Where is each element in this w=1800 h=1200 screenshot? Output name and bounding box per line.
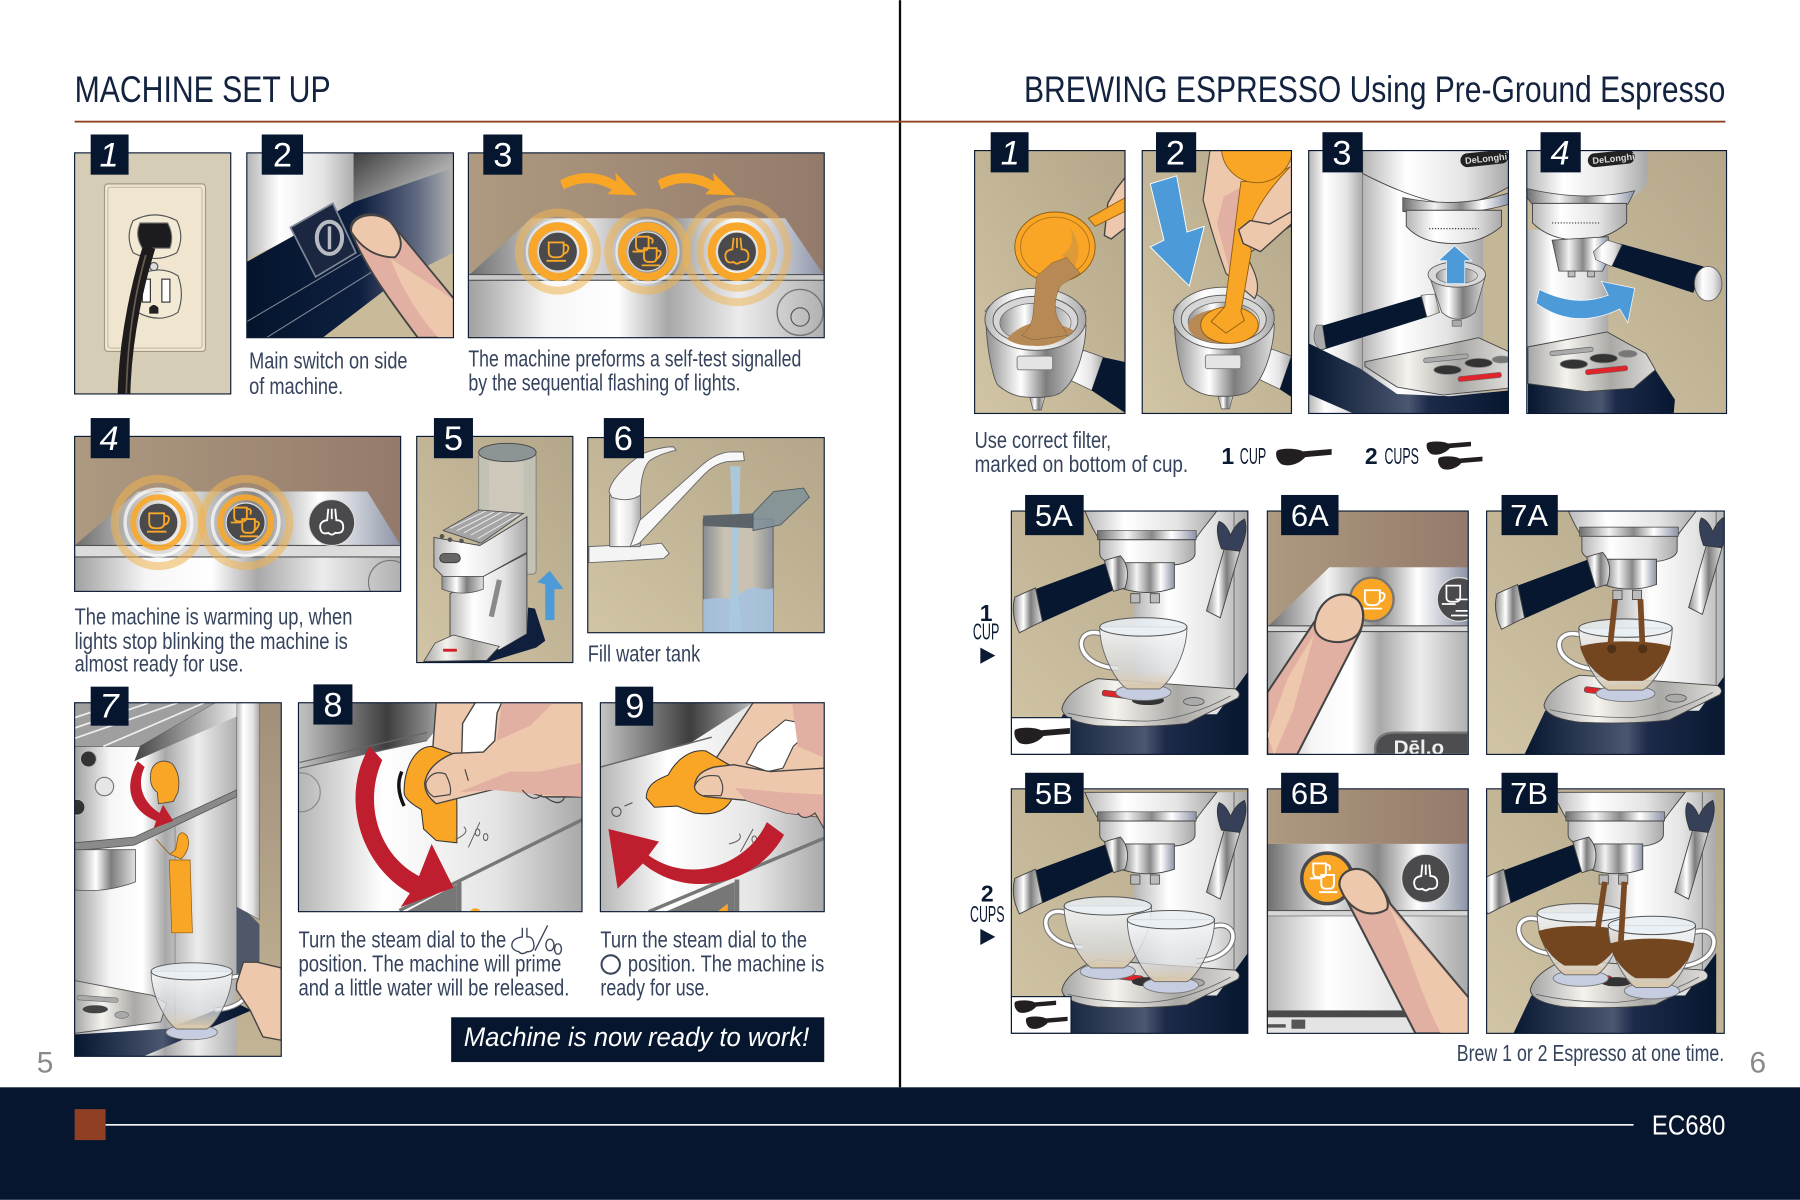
caption: warming up: lights stop blinking the machine is — [75, 628, 348, 654]
step badge: 7 — [99, 688, 120, 726]
caption: warming up — [75, 604, 352, 677]
step badge: 3 — [1332, 134, 1352, 172]
step badge — [1281, 495, 1339, 535]
caption: turn dial back — [600, 926, 824, 1000]
button: steam — [686, 201, 788, 302]
caption: brew one or two: Brew 1 or 2 Espresso at one time. — [1457, 1040, 1724, 1066]
step badge: 6 — [614, 420, 633, 458]
caption: self-test: The machine preforms a self-test signalled — [468, 345, 801, 371]
legend: one cup filter: 1 — [1221, 443, 1234, 469]
step badge — [991, 132, 1029, 172]
caption: warming up: almost ready for use. — [75, 651, 243, 677]
step badge — [91, 418, 130, 458]
legend: two cups filter: CUPS — [1384, 443, 1419, 469]
panel: step 5 insert water tank — [417, 418, 573, 663]
label: 2 cups row — [970, 880, 1004, 945]
panel: step 6 fill water tank — [588, 418, 824, 633]
step badge — [1502, 773, 1558, 813]
caption: fill water tank: Fill water tank — [588, 640, 701, 666]
step badge: 7A — [1510, 498, 1548, 533]
inset: two cup filter — [1011, 997, 1071, 1033]
step badge — [1502, 495, 1558, 535]
centre page divider — [899, 0, 901, 1087]
panel: brew step 3 attach filter holder — [1309, 132, 1511, 413]
caption: use correct filter — [975, 427, 1188, 477]
step badge — [434, 418, 473, 458]
label: 1 cup row: 1 — [980, 600, 993, 626]
step badge: 5A — [1035, 498, 1073, 533]
panel: brew step 3 attach filter holder: DeLonghi — [1465, 152, 1508, 166]
panel: step 2 main switch — [247, 135, 456, 338]
step badge — [1025, 773, 1084, 813]
hand — [236, 962, 281, 1040]
arrow: press down — [1150, 176, 1204, 286]
panel: 7A single espresso pouring — [1487, 495, 1730, 754]
arrow: turn wand — [130, 761, 173, 828]
arrows: sequence — [560, 172, 736, 195]
step badge — [1541, 132, 1581, 172]
arrow: push tank up — [537, 571, 564, 620]
step badge: 4 — [1550, 134, 1570, 172]
step badge — [91, 687, 129, 726]
step badge — [313, 684, 352, 725]
step badge — [1322, 132, 1363, 172]
step badge — [615, 687, 653, 726]
finger — [1267, 594, 1363, 754]
legend: two cups filter — [1365, 441, 1482, 470]
step badge: 3 — [493, 137, 512, 175]
label: 1 cup row: CUP — [973, 619, 999, 645]
caption: main switch: of machine. — [249, 373, 343, 399]
coffee stream — [1022, 257, 1080, 340]
panel: step 9 turn dial back — [600, 687, 824, 912]
hand — [425, 703, 582, 804]
callout: machine ready: Machine is now ready to work! — [464, 1022, 810, 1052]
panel: 5B two cups under spout — [1011, 773, 1248, 1039]
step badge: 6A — [1291, 498, 1329, 533]
steam dial — [150, 761, 179, 804]
caption: main switch — [249, 348, 408, 399]
arrow: turn counter-clockwise — [608, 822, 784, 889]
caption: use correct filter: Use correct filter, — [975, 427, 1111, 453]
caption: warming up: The machine is warming up, when — [75, 604, 352, 630]
step badge — [1156, 132, 1196, 172]
label: 2 cups row: 2 — [981, 880, 994, 906]
arrow: turn clockwise — [356, 746, 453, 907]
step badge: 8 — [323, 687, 342, 725]
label: 2 cups row: CUPS — [970, 901, 1004, 927]
caption: main switch: Main switch on side — [249, 348, 408, 374]
callout: machine ready — [451, 1017, 824, 1062]
caption: self-test: by the sequential flashing of lights. — [468, 369, 740, 395]
button: two cups — [608, 213, 686, 291]
heading: machine set up: MACHINE SET UP — [75, 69, 331, 110]
step badge: 9 — [625, 688, 644, 726]
label: 1 cup row — [973, 600, 999, 664]
step badge — [483, 135, 522, 175]
steam symbol on machine — [456, 822, 488, 847]
step badge: 1 — [1001, 134, 1020, 172]
step badge: 5B — [1035, 776, 1073, 811]
step badge: 4 — [99, 420, 119, 458]
step badge: 1 — [99, 137, 119, 175]
step badge — [262, 135, 303, 175]
page number 6: 6 — [1749, 1046, 1766, 1079]
panel: step 8 turn dial to steam — [281, 684, 582, 920]
panel: 7B double espresso pouring — [1482, 773, 1724, 1039]
finger — [1339, 869, 1471, 1033]
panel: 6A press one cup button: Dēl.o — [1394, 736, 1444, 759]
panel: step 3 self-test lights — [468, 135, 824, 338]
caption: turn dial to steam position: position. The machine will prime — [298, 950, 561, 976]
steam dial — [404, 746, 457, 843]
hand — [695, 765, 824, 818]
button: two cups flashing — [202, 479, 289, 566]
page number 5: 5 — [37, 1046, 53, 1079]
step badge: 7B — [1510, 776, 1548, 811]
caption: self-test — [468, 345, 801, 395]
caption: use correct filter: marked on bottom of cup. — [975, 451, 1188, 477]
caption: turn dial to steam position: and a little water will be released. — [298, 974, 569, 1000]
panel: step 1 plug in outlet — [75, 135, 231, 396]
legend: one cup filter: CUP — [1240, 443, 1266, 469]
step badge: 2 — [1166, 134, 1185, 172]
panel: brew step 4 lock filter holder — [1527, 132, 1727, 413]
button: one cup — [519, 213, 597, 291]
step badge — [91, 135, 129, 175]
arrow: rotate right — [1536, 281, 1635, 323]
caption: turn dial to steam position: Turn the steam dial to the — [298, 926, 506, 952]
arrow: lift up — [1438, 246, 1472, 284]
legend: two cups filter: 2 — [1365, 443, 1378, 469]
step badge — [1025, 495, 1084, 535]
step badge — [1281, 773, 1339, 813]
button: steam off — [309, 500, 355, 545]
panel: 6B press two cup button — [1267, 773, 1471, 1033]
button: one cup flashing — [115, 479, 202, 566]
legend: one cup filter — [1221, 443, 1332, 469]
step badge: 5 — [444, 420, 463, 458]
model number: EC680 — [1652, 1109, 1725, 1140]
caption: turn dial back: ready for use. — [600, 974, 709, 1000]
step badge: 2 — [273, 137, 292, 175]
inset: one cup filter — [1011, 718, 1071, 754]
panel: step 4 warming up lights — [75, 418, 412, 604]
panel: brew step 4 lock filter holder: DeLonghi — [1592, 152, 1635, 166]
caption: turn dial back: Turn the steam dial to the — [600, 926, 807, 952]
panel: brew step 1 fill filter — [975, 132, 1130, 416]
caption: turn dial back: position. The machine is — [628, 950, 824, 976]
panel: step 7 insert steam wand into cup — [69, 687, 281, 1056]
orange wand — [156, 833, 192, 933]
steam dial — [646, 751, 732, 814]
panel: 5A cup under spout — [1011, 495, 1248, 758]
step badge — [604, 418, 644, 458]
step badge: 6B — [1291, 776, 1329, 811]
footer band — [0, 1087, 1800, 1200]
panel: brew step 2 tamp — [1142, 132, 1292, 414]
panel: 6A press one cup button — [1267, 495, 1481, 759]
caption: turn dial to steam position — [298, 925, 569, 1000]
